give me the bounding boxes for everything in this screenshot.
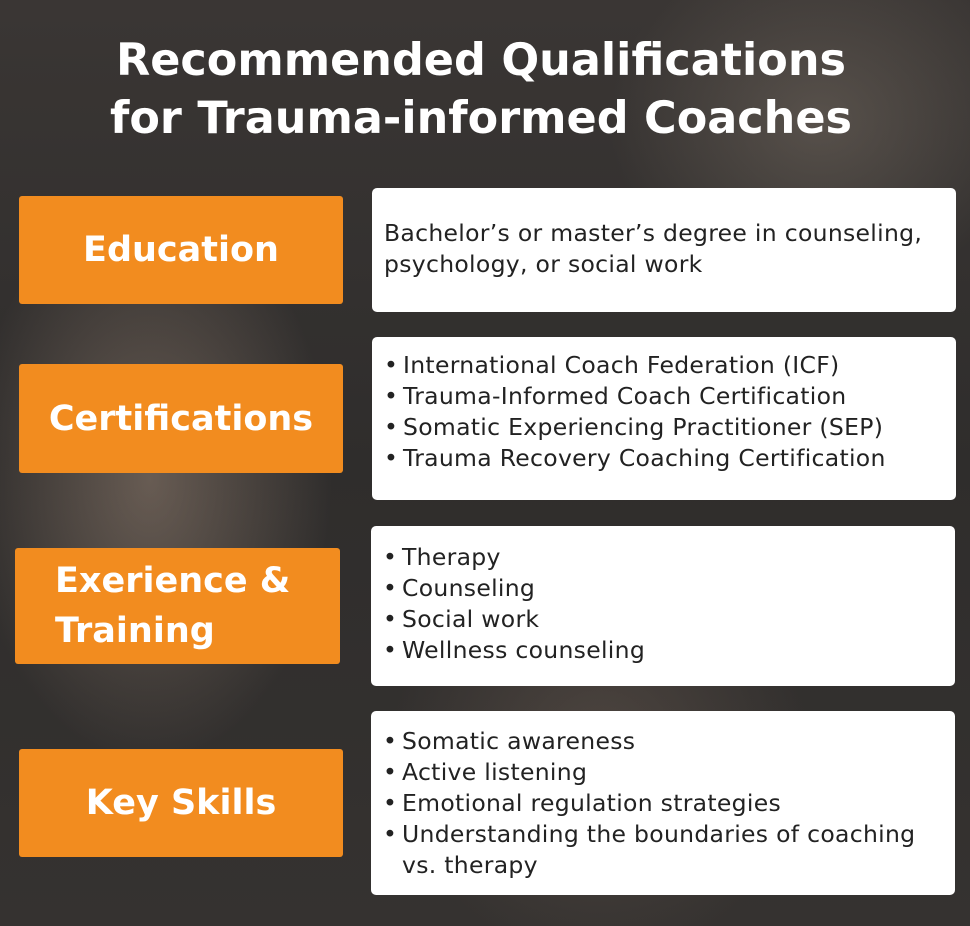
label: education: Education	[83, 230, 279, 270]
label: key skills	[19, 749, 343, 857]
box: key skills: Understanding the boundaries of coaching	[402, 820, 915, 848]
box: experience	[371, 526, 955, 686]
title	[110, 35, 852, 144]
box: experience: Counseling	[402, 574, 535, 602]
box: key skills: Somatic awareness	[402, 727, 635, 755]
box: certifications: International Coach Federation (ICF)	[403, 351, 840, 379]
label: experience: Exerience &	[55, 561, 290, 601]
box: certifications: Trauma-Informed Coach Certification	[403, 382, 846, 410]
label: key skills: Key Skills	[86, 783, 276, 823]
box: certifications: Somatic Experiencing Practitioner (SEP)	[403, 413, 883, 441]
box: education: Bachelor’s or master’s degree in counseling, psychology, or social work	[384, 219, 922, 278]
box: key skills: vs. therapy	[402, 851, 538, 879]
label: experience	[15, 548, 340, 664]
label: experience: Training	[55, 611, 215, 651]
title: Recommended Qualifications	[116, 35, 846, 86]
box: key skills: Emotional regulation strategies	[402, 789, 781, 817]
box: key skills: Active listening	[402, 758, 587, 786]
label: certifications: Certifications	[49, 398, 313, 438]
box: certifications: Trauma Recovery Coaching Certification	[403, 444, 886, 472]
title: for Trauma-informed Coaches	[110, 93, 852, 144]
box: experience: Wellness counseling	[402, 636, 645, 664]
box: education	[372, 188, 956, 312]
box: experience: Therapy	[402, 543, 501, 571]
box: experience: Social work	[402, 605, 539, 633]
box: key skills	[371, 711, 955, 895]
box: certifications	[372, 337, 956, 500]
label: education	[19, 196, 343, 304]
label: certifications	[19, 364, 343, 473]
